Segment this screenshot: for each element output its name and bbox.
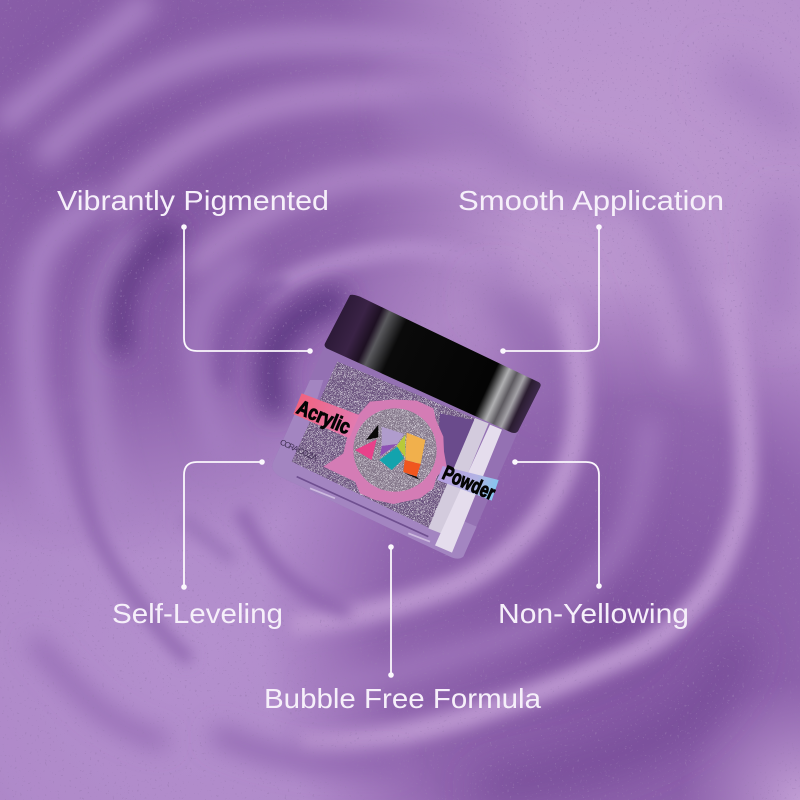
logo disc: [353, 408, 437, 492]
white stripes: [428, 418, 489, 534]
small print: CCRA.CO.ZA: [278, 438, 319, 463]
callout: Bubble Free Formula: Bubble Free Formula: [264, 683, 541, 714]
callout: Non-Yellowing: [498, 459, 689, 629]
jar body: [272, 345, 518, 559]
label: Powder: [437, 462, 499, 505]
powder fill: [292, 362, 478, 528]
callout: Smooth Application: [458, 185, 724, 354]
jar lid: [325, 295, 541, 433]
callout: Non-Yellowing: Non-Yellowing: [498, 598, 689, 629]
pink splash label: [323, 399, 447, 504]
deep shadows beside the jar: [119, 235, 170, 345]
top-right soft dark bands: [400, 109, 700, 367]
callout: Self-Leveling: [112, 459, 283, 629]
label: Acrylic: Acrylic: [293, 396, 354, 439]
right and bottom-right light ridges: [290, 300, 579, 625]
glass base lines: [297, 477, 428, 537]
callout: Self-Leveling: Self-Leveling: [112, 598, 283, 629]
callout: Vibrantly Pigmented: Vibrantly Pigmented: [57, 185, 329, 216]
bottom-left dark folds: [70, 410, 190, 660]
label: Powder: Powder: [439, 462, 499, 505]
logo: [355, 425, 425, 480]
callout: Smooth Application: Smooth Application: [458, 185, 724, 216]
top-left light ridges: [0, 0, 150, 125]
callout: Bubble Free Formula: [264, 544, 541, 714]
product jar: [272, 295, 541, 559]
callout: Vibrantly Pigmented: [57, 185, 329, 354]
